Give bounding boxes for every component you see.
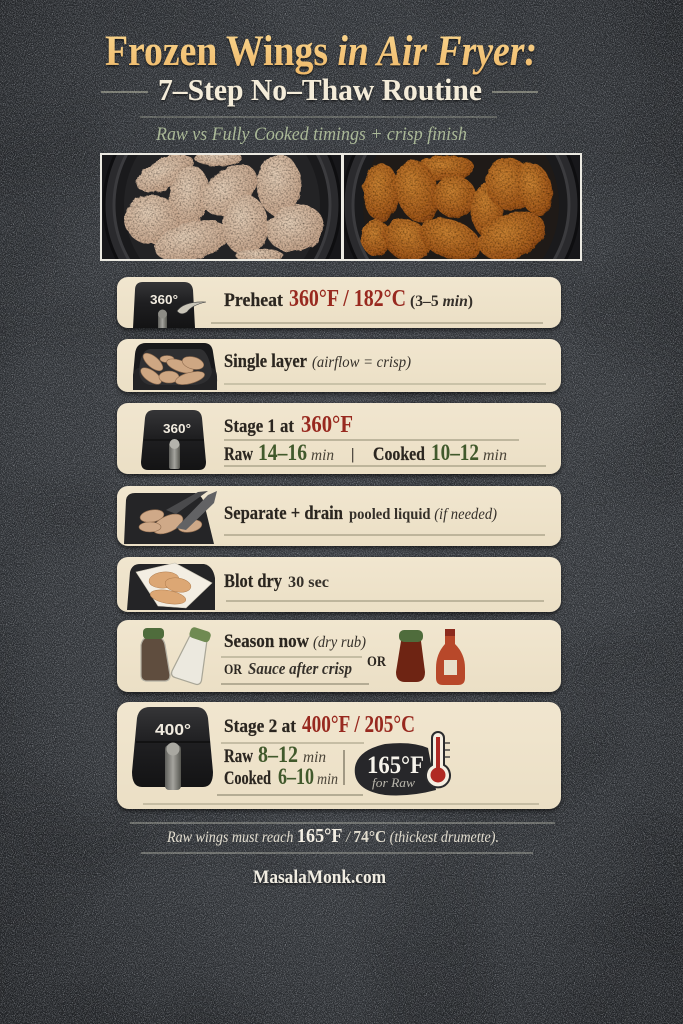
- step 2: single layer: [117, 339, 561, 392]
- icon: air fryer 400: [132, 707, 213, 790]
- text: separate and drain: Separate + drain: [224, 503, 343, 524]
- brand: masalamonk.com: MasalaMonk.com: [253, 867, 386, 888]
- badge: 165F for raw: 165°F: [367, 752, 424, 779]
- step 6: season or sauce: [117, 620, 561, 692]
- text: season now: Season now: [224, 631, 309, 652]
- tagline: Raw vs Fully Cooked timings + crisp finish: [155, 124, 467, 145]
- footer note: [130, 823, 555, 853]
- text: stage 2 heading: [224, 712, 415, 738]
- text: stage 1 timings: Cooked: [373, 444, 425, 465]
- text: stage 1 timings: 10–12: [431, 440, 479, 465]
- text: separate and drain: [224, 503, 497, 524]
- text: sauce after crisp: OR: [224, 662, 242, 678]
- text: stage 2 heading: 400°F / 205°C: [302, 712, 415, 738]
- text: preheat: (3–5 min): [410, 293, 473, 310]
- text: single layer: [224, 351, 411, 372]
- text: stage 1 timings: [224, 440, 507, 465]
- text: stage 2 timings: [224, 742, 338, 789]
- subtitle: 7–Step No–Thaw Routine: [158, 72, 482, 107]
- label: or: OR: [367, 654, 386, 670]
- text: blot dry: 30 sec: [288, 574, 329, 591]
- icon: thermometer: [426, 732, 450, 787]
- text: stage 2 heading: Stage 2 at: [224, 716, 297, 737]
- step 5: blot dry: [117, 557, 561, 612]
- text: season now: (dry rub): [313, 634, 366, 651]
- main title: Frozen Wings in Air Fryer:: [105, 28, 537, 75]
- text: preheat: 360°F / 182°C: [289, 286, 406, 312]
- photo comparison: [100, 153, 582, 261]
- text: single layer: (airflow = crisp): [312, 354, 411, 371]
- text: single layer: Single layer: [224, 351, 307, 372]
- text: stage 2 timings: min: [317, 771, 338, 788]
- text: sauce after crisp: Sauce after crisp: [248, 659, 352, 678]
- step 3: stage 1: [117, 403, 561, 474]
- text: stage 1 timings: |: [351, 446, 354, 463]
- text: preheat: [224, 286, 473, 312]
- icon: sauce jar and bottle: [396, 629, 465, 685]
- step 4: separate and drain: [117, 486, 561, 546]
- icon: air fryer 360 with steam: [133, 282, 206, 328]
- text: blot dry: [224, 571, 329, 592]
- icon: air fryer 360 with steam: 360°: [150, 293, 178, 307]
- step 7: stage 2: [117, 702, 561, 809]
- text: stage 2 timings: 6–10: [278, 764, 314, 789]
- icon: wings on paper towel: [127, 563, 215, 610]
- text: stage 2 timings: Cooked: [224, 768, 271, 789]
- text: preheat: Preheat: [224, 290, 284, 311]
- badge: 165F for raw: for Raw: [372, 775, 415, 790]
- icon: air fryer 400: 400°: [155, 722, 191, 739]
- text: stage 1 heading: [224, 412, 353, 438]
- icon: basket with wings: [133, 343, 217, 390]
- text: stage 1 timings: min: [311, 447, 334, 464]
- text: separate and drain: pooled liquid (if needed): [349, 506, 497, 523]
- icon: pepper and salt shakers: [141, 625, 217, 686]
- photo: crispy cooked wings: [344, 155, 580, 259]
- text: stage 1 timings: min: [483, 447, 507, 464]
- text: blot dry: Blot dry: [224, 571, 282, 592]
- text: stage 2 timings: Raw: [224, 746, 253, 767]
- step 1: preheat: [117, 277, 561, 328]
- photo: raw frozen wings: [102, 155, 341, 259]
- text: stage 1 timings: 14–16: [258, 440, 307, 465]
- text: season now: [224, 631, 366, 652]
- text: stage 2 timings: 8–12: [258, 742, 298, 767]
- footer note: Raw wings must reach 165°F / 74°C (thickest drumette).: [166, 825, 499, 847]
- icon: tongs in basket: [124, 491, 217, 544]
- icon: air fryer 360: [141, 410, 206, 470]
- icon: air fryer 360: 360°: [163, 421, 191, 436]
- badge: 165F for raw: [355, 743, 436, 795]
- title block: [101, 28, 538, 145]
- text: stage 2 timings: min: [303, 749, 326, 766]
- text: stage 1 heading: Stage 1 at: [224, 416, 295, 437]
- text: stage 1 heading: 360°F: [301, 412, 353, 438]
- text: stage 1 timings: Raw: [224, 444, 253, 465]
